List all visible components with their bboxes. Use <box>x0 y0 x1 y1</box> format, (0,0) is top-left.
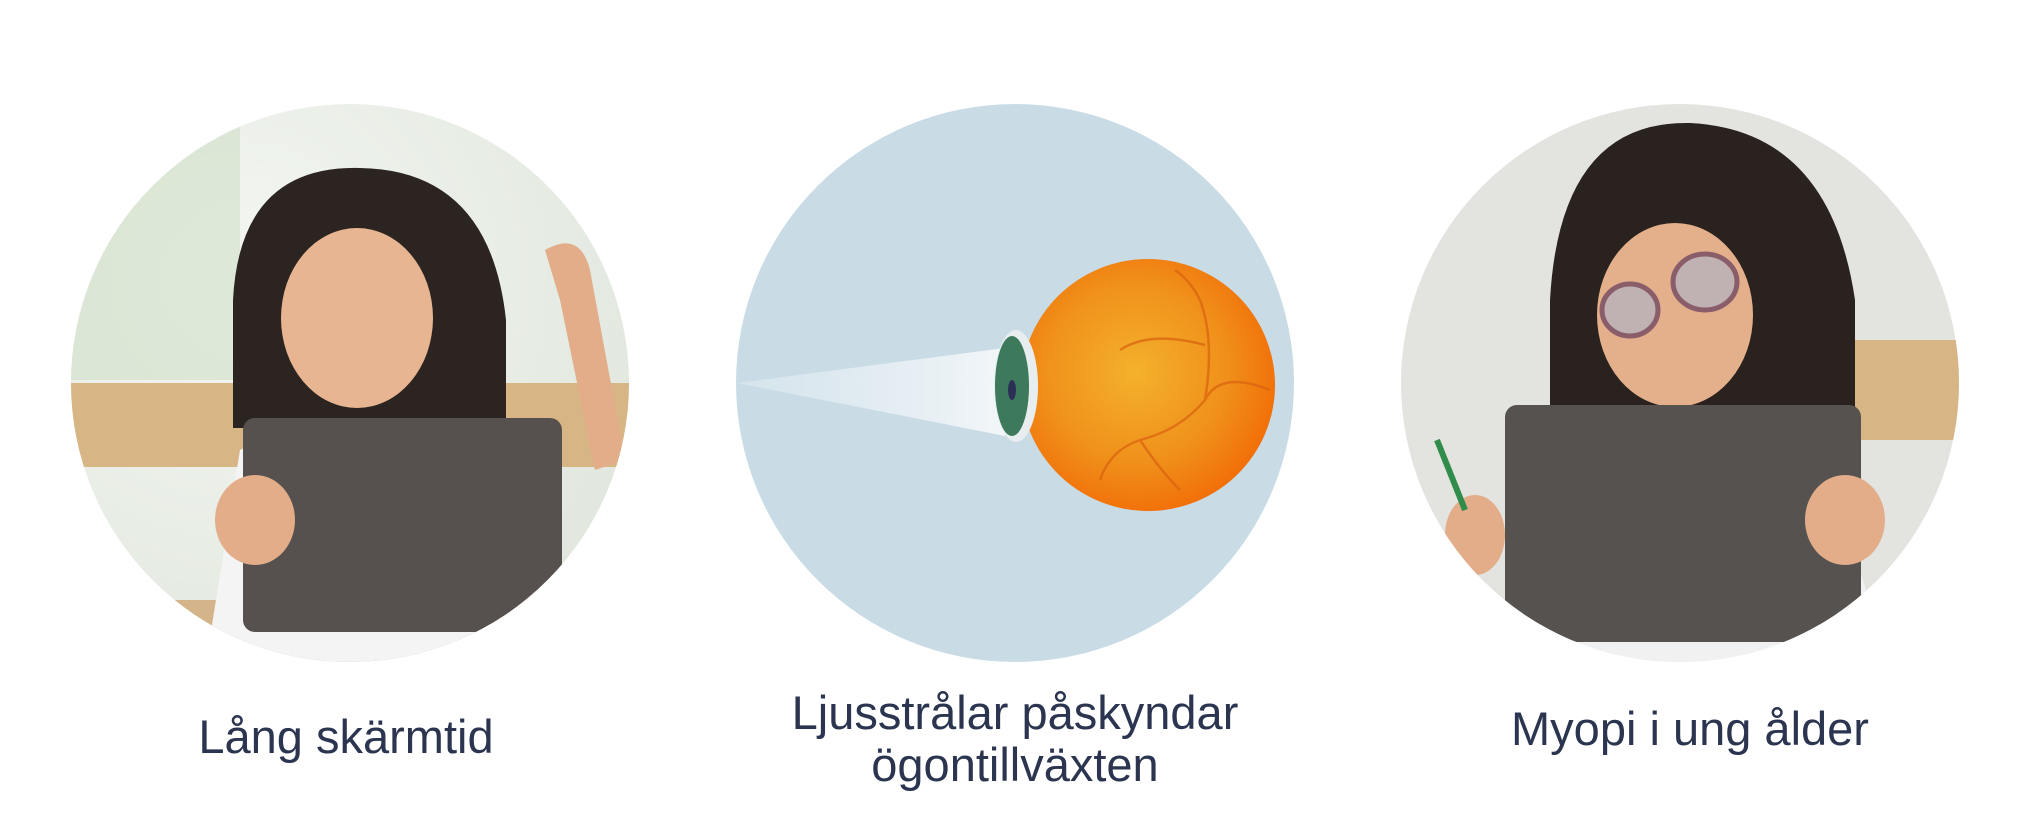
panel: right photo (myopia at young age) <box>1401 104 1959 662</box>
panel: left photo (long screen time) <box>71 104 629 662</box>
text: middle caption: Ljusstrålar påskyndar <box>792 686 1238 739</box>
panel: middle eye illustration <box>736 104 1294 662</box>
text: middle caption: ögontillväxten <box>871 738 1159 791</box>
cornea <box>994 330 1038 442</box>
text: middle caption <box>792 686 1238 791</box>
eyeball <box>1021 259 1275 511</box>
light beam <box>737 348 1005 436</box>
text: right caption: Myopi i ung ålder <box>1511 702 1869 755</box>
text: left caption: Lång skärmtid <box>198 710 494 763</box>
